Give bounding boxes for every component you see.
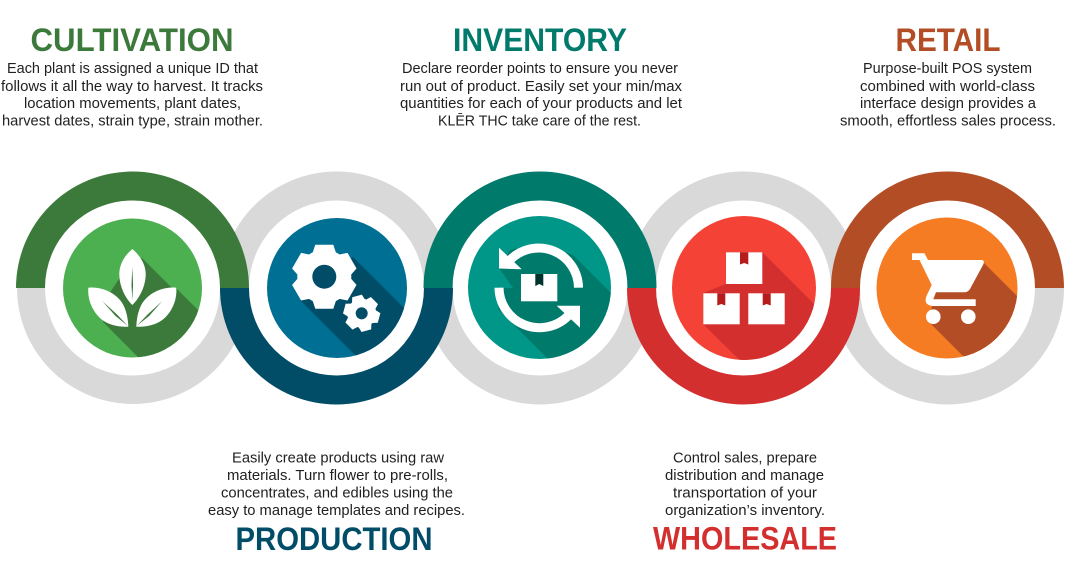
wholesale description [665,450,825,519]
production description [208,450,465,519]
cultivation arc [16,172,249,288]
retail arc [831,172,1064,288]
wholesale heading: WHOLESALE [653,520,837,556]
retail description: Purpose-built POS system [863,60,1032,77]
cultivation description: Each plant is assigned a unique ID that [7,60,259,77]
wholesale arc [627,288,860,404]
production heading: PRODUCTION [236,521,432,557]
panel: cultivation [1,28,262,358]
retail description [840,60,1056,130]
icon: shopping cart [876,218,1018,358]
panel: wholesale [627,216,880,556]
production description: concentrates, and edibles using the [221,484,453,502]
inventory description [400,60,683,130]
cultivation description: harvest dates, strain type, strain mother. [2,112,263,130]
wholesale description: transportation of your [673,484,817,502]
wholesale description: Control sales, prepare [673,450,817,467]
inventory description: quantities for each of your products and let [400,95,683,112]
inventory description: Declare reorder points to ensure you never [402,60,678,77]
icon: inventory cycle [468,216,611,359]
retail heading: RETAIL [896,22,1000,58]
retail description: combined with world-class [860,78,1035,95]
inventory description: run out of product. Easily set your min/max [400,78,682,95]
retail description: interface design provides a [860,95,1037,112]
production description: materials. Turn flower to pre-rolls, [227,467,448,484]
panel: inventory [400,28,682,359]
production description: Easily create products using raw [232,450,444,467]
production arc [220,288,453,404]
wholesale description: organization’s inventory. [665,502,825,519]
retail description: smooth, effortless sales process. [840,112,1056,130]
inventory description: KLĒR THC take care of the rest. [438,112,641,130]
icon: stacked boxes [672,216,816,360]
inventory arc [424,172,656,288]
grey background rings [17,172,1064,404]
cultivation description: follows it all the way to harvest. It tracks [1,78,263,95]
production description: easy to manage templates and recipes. [208,502,465,519]
inventory heading: INVENTORY [453,22,627,58]
panel: retail [831,28,1064,358]
icon: gears [267,218,407,358]
cultivation heading: CULTIVATION [30,22,234,58]
panel: production [208,218,465,557]
icon: plant leaves [63,218,202,358]
cultivation description: location movements, plant dates, [24,95,241,112]
cultivation description [1,60,263,130]
wholesale description: distribution and manage [665,467,824,484]
